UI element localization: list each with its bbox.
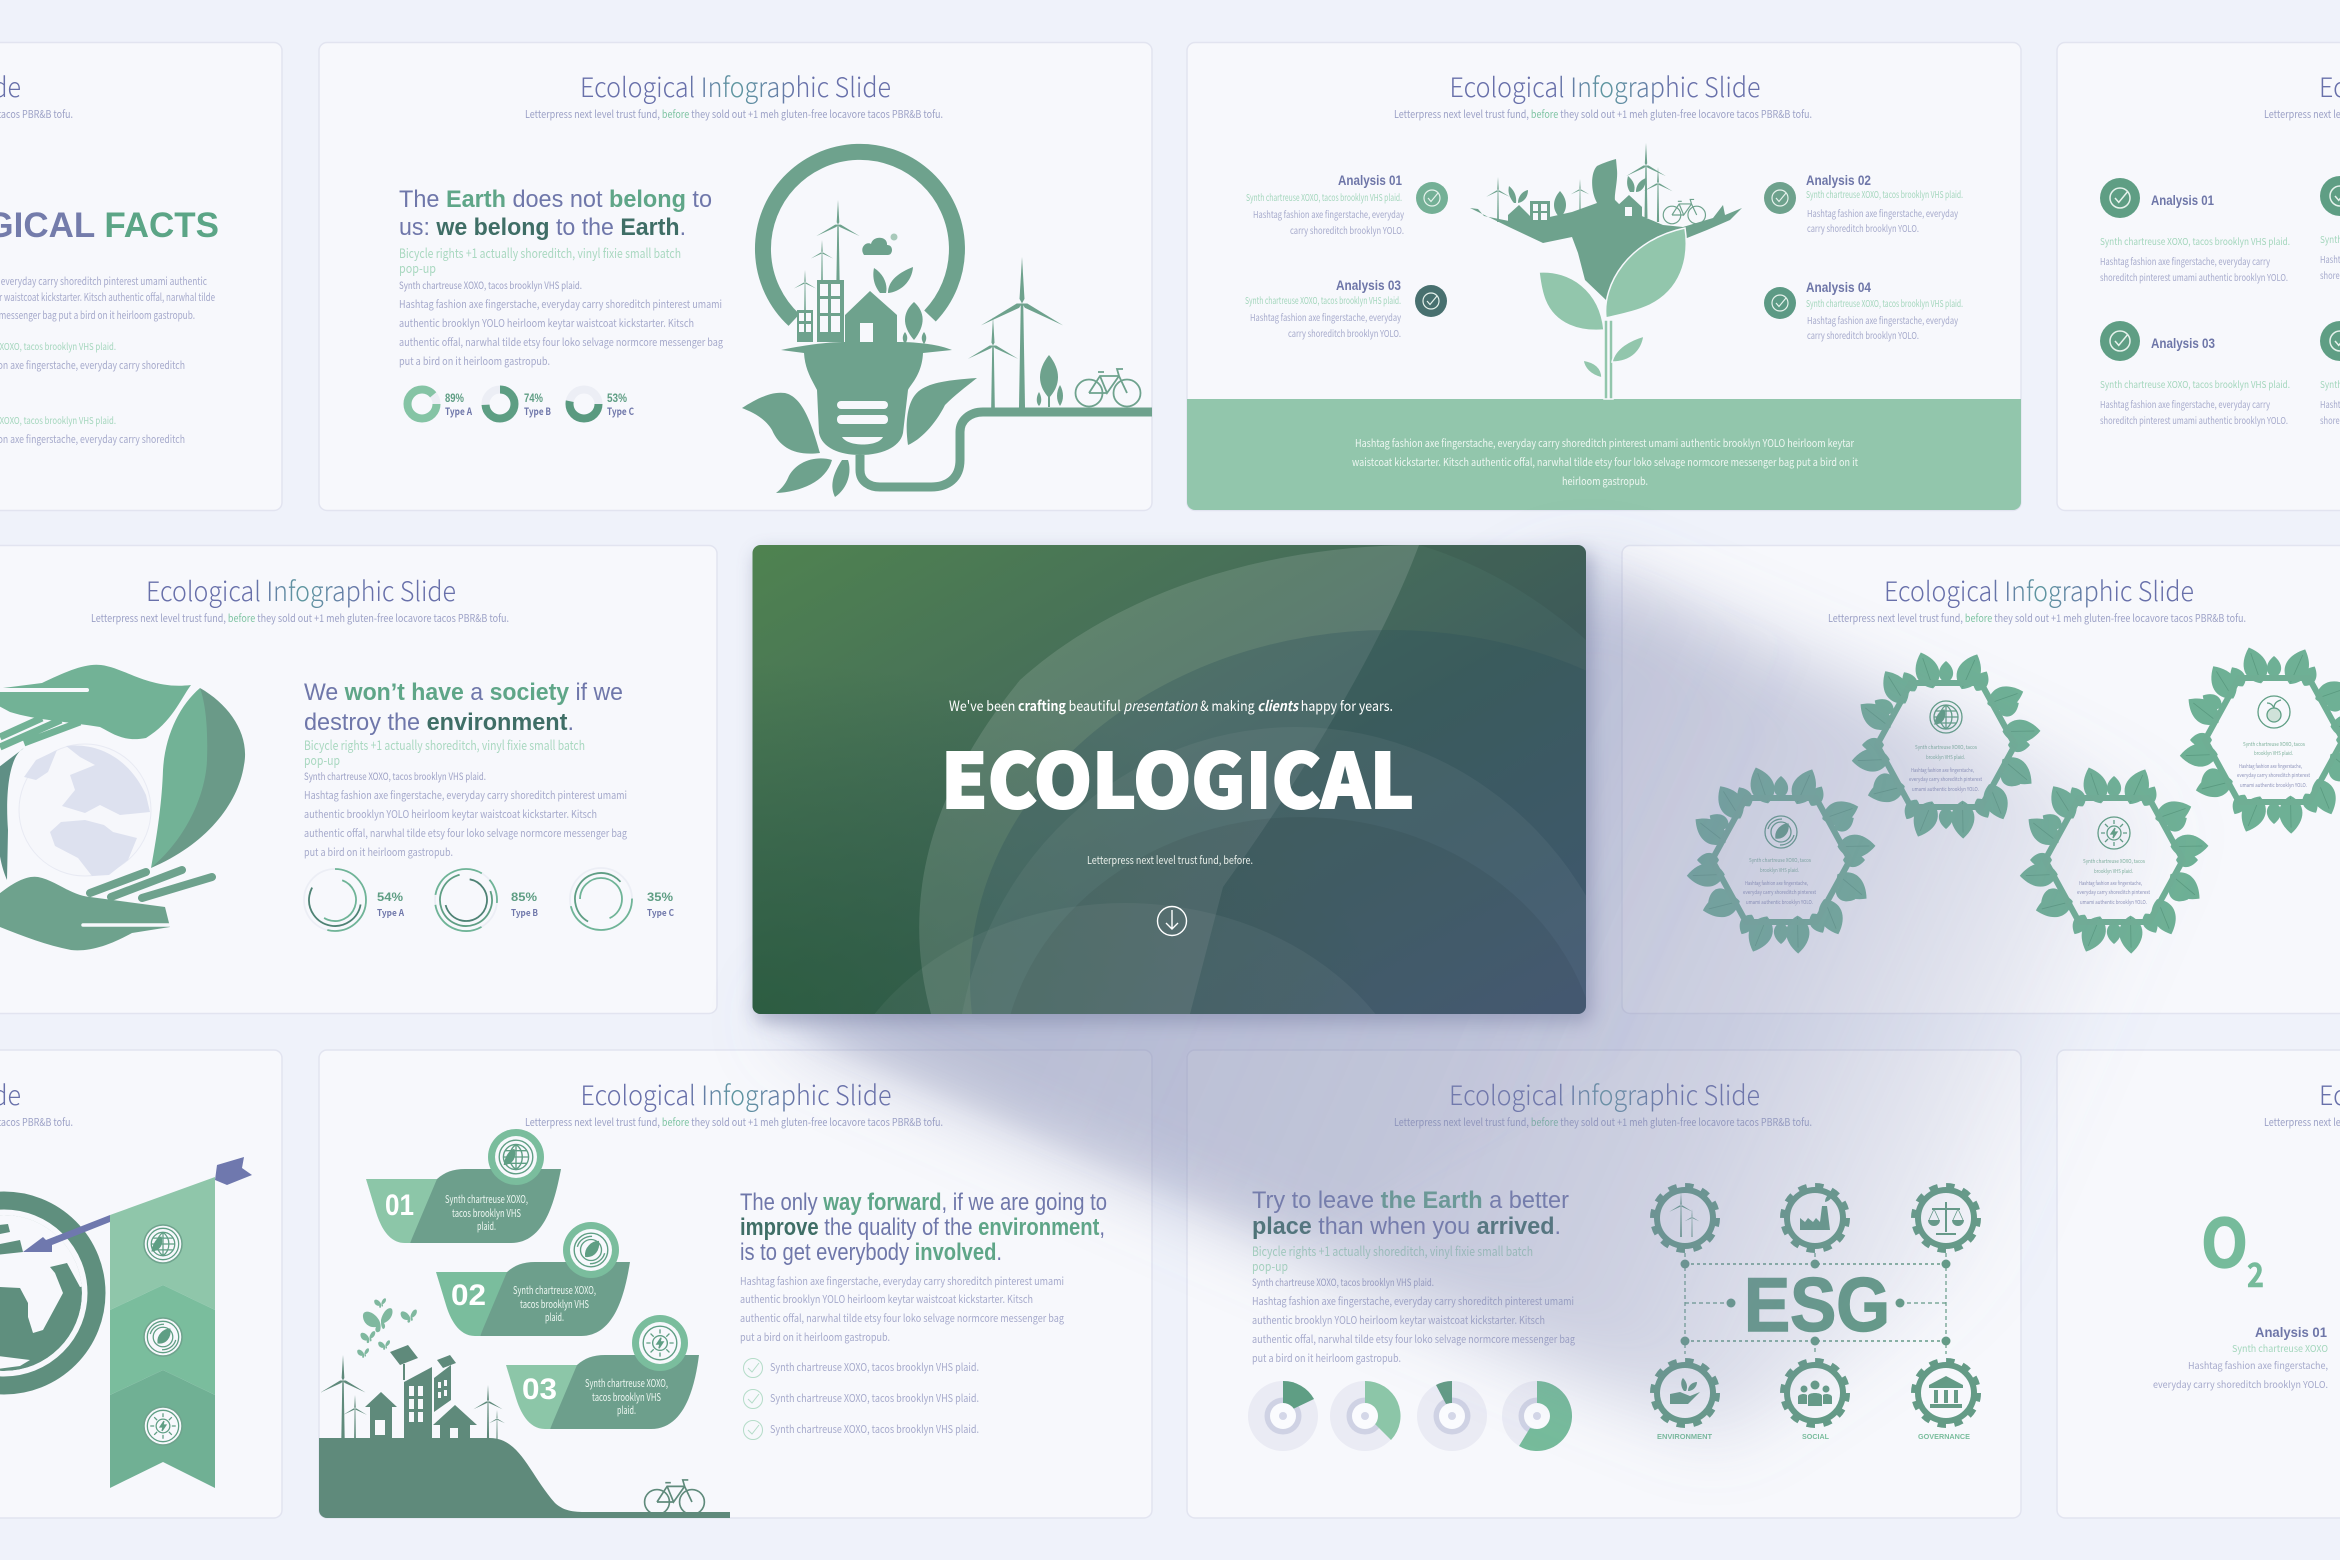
heading: We won’t have a society if we: [304, 679, 623, 706]
title: Letterpress next level trust fund, before they sold out +1 meh gluten-free locavore tacos PBR&B tofu.: [1394, 107, 1812, 122]
step 02: tacos brooklyn VHS: [520, 1297, 589, 1312]
title: [0, 1074, 73, 1130]
glow around centre slide: [755, 551, 1592, 1022]
step 02: plaid.: [545, 1310, 564, 1325]
hexagon 1: Hashtag fashion axe fingerstache,: [1745, 879, 1808, 887]
title: Ecological Infographic Slide: [1449, 1074, 1760, 1113]
heading: place than when you arrived.: [1252, 1213, 1561, 1240]
icon: gear scales: [1914, 1186, 1978, 1250]
text block: authentic offal, narwhal tilde etsy four loko selvage normcore messenger bag: [740, 1311, 1064, 1326]
title: Ecological Infographic Slide: [580, 66, 891, 105]
text block: Bicycle rights +1 actually shoreditch, vinyl fixie small batch: [399, 243, 681, 262]
title: [1394, 1074, 1812, 1130]
text block: [0, 274, 215, 447]
text block: put a bird on it heirloom gastropub.: [399, 354, 550, 369]
step 01: [366, 1129, 561, 1243]
title: Letterpress next level trust fund, before they sold out +1 meh gluten-free locavore tacos PBR&B tofu.: [525, 1115, 943, 1130]
title: [0, 66, 73, 122]
step 01: Synth chartreuse XOXO,: [445, 1192, 528, 1207]
title: Ecological Infographic Slide: [146, 570, 456, 609]
analysis 03: shoreditch pinterest umami authentic brooklyn YOLO.: [2100, 413, 2288, 427]
gear labels: SOCIAL: [1802, 1432, 1829, 1441]
step 03: plaid.: [617, 1403, 636, 1418]
analysis 03: carry shoreditch brooklyn YOLO.: [1288, 326, 1401, 340]
text block: authentic offal, narwhal tilde etsy four loko selvage normcore messenger bag: [304, 826, 627, 841]
text block: pop-up: [1252, 1256, 1288, 1275]
title: Letterpress next level trust fund, before they sold out +1 meh gluten-free locavore tacos PBR&B tofu.: [91, 611, 509, 626]
heading: [1252, 1187, 1569, 1240]
hexagon 3: everyday carry shoreditch pinterest: [2077, 888, 2150, 896]
heading: The Earth does not belong to: [399, 186, 712, 213]
heading: The only way forward, if we are going to: [740, 1189, 1107, 1216]
panel: society and environment: [0, 546, 717, 1014]
analysis 03: [1245, 277, 1447, 340]
green footer band: waistcoat kickstarter. Kitsch authentic offal, narwhal tilde etsy four loko selvage normcore messenger bag put a bird on it: [1352, 455, 1858, 470]
panel: centre cover slide: [752, 545, 1586, 1014]
analysis 03: Analysis 03: [1336, 277, 1401, 293]
green footer band: Hashtag fashion axe fingerstache, everyday carry shoreditch pinterest umami authentic brooklyn YOLO heirloom keytar: [1355, 436, 1855, 451]
step 01: plaid.: [477, 1219, 496, 1234]
gear labels: [1657, 1432, 1970, 1441]
O2 symbol: 2: [2247, 1249, 2264, 1297]
analysis 01: Analysis 01: [2151, 192, 2214, 208]
hexagon 1: Synth chartreuse XOXO, tacos: [1749, 856, 1811, 864]
analysis 04: Analysis 04: [1806, 279, 1871, 295]
O2 symbol: O: [2201, 1191, 2248, 1287]
green footer band: heirloom gastropub.: [1562, 474, 1648, 489]
text block: put a bird on it heirloom gastropub.: [1252, 1351, 1401, 1366]
title: [525, 66, 943, 122]
text block: Synth chartreuse XOXO, tacos brooklyn VHS plaid.: [304, 768, 486, 783]
analysis 02: carry shoreditch brooklyn YOLO.: [1807, 221, 1919, 235]
analysis 03: [2100, 321, 2290, 427]
hexagon 3: Hashtag fashion axe fingerstache,: [2079, 879, 2142, 887]
subtitle: Letterpress next level trust fund, before.: [1087, 852, 1253, 868]
panel: O2 analysis (cropped right): [2057, 1050, 2340, 1518]
icon: gear factory: [1782, 1186, 1848, 1250]
text block: [304, 735, 627, 860]
hexagon 2: everyday carry shoreditch pinterest: [1909, 775, 1982, 783]
text block: authentic brooklyn YOLO heirloom keytar waistcoat kickstarter. Kitsch: [304, 807, 597, 822]
green footer band: [1187, 399, 2021, 510]
icon: gear governance: [1914, 1360, 1978, 1426]
donut charts: [408, 390, 634, 418]
heading: Try to leave the Earth a better: [1252, 1187, 1569, 1214]
hexagon 3: [2019, 764, 2209, 956]
text block: [399, 243, 723, 369]
analysis 03: Hashtag fashion axe fingerstache, everyday carry: [2100, 397, 2270, 411]
hexagon 4 (cropped): umami authentic brooklyn YOLO.: [2240, 781, 2307, 789]
analysis 03: Synth chartreuse XOXO, tacos brooklyn VHS plaid.: [2100, 377, 2290, 391]
analysis 01: [2100, 178, 2290, 284]
donut charts: 74%: [524, 391, 543, 405]
analysis 01: [1246, 172, 1448, 237]
checklist: Synth chartreuse XOXO, tacos brooklyn VHS plaid.: [770, 1422, 979, 1437]
title: [525, 1074, 943, 1130]
title: Letterpress next level trust fund, before they sold out +1 meh gluten-free locavore tacos PBR&B tofu.: [1394, 1115, 1812, 1130]
hexagon 2: Synth chartreuse XOXO, tacos: [1915, 743, 1977, 751]
title: [2264, 1074, 2340, 1130]
title: [1394, 66, 1812, 122]
analysis 04: [1764, 279, 1963, 342]
step 03: 03: [522, 1373, 557, 1406]
donut charts: 53%: [607, 391, 627, 405]
ring charts: [304, 858, 674, 942]
analysis 02: [1764, 172, 1963, 235]
hexagon 2: Hashtag fashion axe fingerstache,: [1911, 766, 1974, 774]
text block: put a bird on it heirloom gastropub.: [304, 845, 453, 860]
title: Letterpress next level trust fund, before they sold out +1 meh gluten-free locavore tacos PBR&B tofu.: [525, 107, 943, 122]
step 01: tacos brooklyn VHS: [452, 1206, 521, 1221]
text block: authentic offal, narwhal tilde etsy four loko selvage normcore messenger bag: [1252, 1332, 1575, 1347]
title: Ecological Infographic Slide: [1884, 570, 2194, 609]
analysis 01: Analysis 01: [2255, 1324, 2327, 1340]
donut charts: Type A: [445, 403, 472, 418]
hexagon 3: Synth chartreuse XOXO, tacos: [2083, 857, 2145, 865]
analysis 01: Analysis 01: [1338, 172, 1402, 188]
background curves: [875, 545, 1586, 1014]
analysis 03: Synth chartreuse XOXO, tacos brooklyn VHS plaid.: [1245, 293, 1401, 307]
title: Ecological Infographic Slide: [580, 1074, 892, 1113]
panel: analysis list (cropped right): [2057, 42, 2340, 510]
ring charts: Type B: [511, 906, 538, 919]
icon: gear wind turbines: [1652, 1186, 1718, 1250]
hexagon 4 (cropped): [2179, 644, 2340, 836]
analysis 01: Hashtag fashion axe fingerstache, everyday carry: [2100, 254, 2270, 268]
panel: analysis with man and plant: [1187, 42, 2021, 510]
analysis 01: [2153, 1324, 2328, 1391]
text block: Synth chartreuse XOXO, tacos brooklyn VHS plaid.: [399, 277, 582, 292]
text block: authentic offal, narwhal tilde etsy four loko selvage normcore messenger bag: [399, 335, 723, 350]
text block: authentic brooklyn YOLO heirloom keytar waistcoat kickstarter. Kitsch: [740, 1292, 1033, 1307]
illustration: hands and globe: [0, 665, 245, 950]
analysis 03: Analysis 03: [2151, 335, 2215, 351]
analysis 01: carry shoreditch brooklyn YOLO.: [1290, 223, 1404, 237]
checklist: Synth chartreuse XOXO, tacos brooklyn VHS plaid.: [770, 1391, 979, 1406]
heading: [304, 679, 623, 736]
analysis 01: Synth chartreuse XOXO, tacos brooklyn VHS plaid.: [1246, 190, 1402, 204]
ESG connectors: [1680, 1253, 1950, 1354]
ring charts: Type C: [647, 906, 674, 919]
heading: [740, 1189, 1107, 1266]
title: Letterpress next level trust fund, before they sold out +1 meh gluten-free locavore tacos PBR&B tofu.: [1828, 611, 2246, 626]
analysis 04: Synth chartreuse XOXO, tacos brooklyn VHS plaid.: [1806, 296, 1963, 310]
title: [2264, 66, 2340, 122]
donut chart 1: [1248, 1381, 1318, 1451]
hexagon 1: umami authentic brooklyn YOLO.: [1746, 898, 1813, 906]
hexagon 4 (cropped): brooklyn VHS plaid.: [2254, 749, 2293, 757]
hexagon 4 (cropped): everyday carry shoreditch pinterest: [2237, 771, 2310, 779]
text block: Bicycle rights +1 actually shoreditch, vinyl fixie small batch: [304, 735, 585, 754]
donut charts: 89%: [445, 391, 464, 405]
ribbon: [110, 1177, 215, 1488]
text block: Hashtag fashion axe fingerstache, everyday carry shoreditch pinterest umami: [1252, 1294, 1574, 1309]
cast shadow of centre slide: crisp near layer: [752, 555, 2130, 1245]
analysis 03: Hashtag fashion axe fingerstache, everyday: [1250, 310, 1401, 324]
hexagon 1: [1686, 764, 1876, 956]
step 02: [436, 1222, 630, 1336]
text block: authentic brooklyn YOLO heirloom keytar waistcoat kickstarter. Kitsch: [399, 316, 694, 331]
analysis 02: Hashtag fashion axe fingerstache, everyday: [1807, 206, 1958, 220]
icon: down arrow in circle: [1158, 906, 1186, 936]
text block: Hashtag fashion axe fingerstache, everyday carry shoreditch pinterest umami: [399, 297, 722, 312]
tagline: We've been crafting beautiful presentation & making clients happy for years.: [949, 696, 1393, 716]
panel: globe and ribbon (cropped left): [0, 1050, 282, 1518]
panel: ESG: [1187, 1050, 2021, 1518]
hexagon 2: brooklyn VHS plaid.: [1926, 753, 1965, 761]
hexagon 4 (cropped): Hashtag fashion axe fingerstache,: [2239, 762, 2302, 770]
step 03: [506, 1315, 699, 1429]
checklist: Synth chartreuse XOXO, tacos brooklyn VHS plaid.: [770, 1360, 979, 1375]
heading: destroy the environment.: [304, 709, 574, 736]
text block: authentic brooklyn YOLO heirloom keytar waistcoat kickstarter. Kitsch: [1252, 1313, 1545, 1328]
hexagon 3: brooklyn VHS plaid.: [2094, 867, 2133, 875]
donut charts: Type C: [607, 403, 634, 418]
hexagon 2: [1851, 649, 2041, 841]
title: Ecological Infographic Slide: [1450, 66, 1760, 105]
panel: hexagon leaf wreaths: [1622, 546, 2340, 1014]
text block: pop-up: [304, 750, 340, 769]
hexagon 4 (cropped): Synth chartreuse XOXO, tacos: [2243, 740, 2305, 748]
ring charts: 35%: [647, 890, 673, 904]
cast shadow of centre slide: soft wide layer: [770, 570, 2340, 1440]
donut charts: Type B: [524, 403, 551, 418]
analysis 01: Hashtag fashion axe fingerstache, everyday: [1253, 207, 1404, 221]
icon: gear social: [1782, 1360, 1848, 1426]
step 02: Synth chartreuse XOXO,: [513, 1283, 596, 1298]
analysis 01: everyday carry shoreditch brooklyn YOLO.: [2153, 1377, 2328, 1391]
analysis 04: carry shoreditch brooklyn YOLO.: [1807, 328, 1919, 342]
illustration: light bulb with city and turbines: [742, 152, 1152, 497]
heading: [399, 186, 712, 241]
text block: [740, 1274, 1064, 1345]
donut chart 4: [1502, 1381, 1572, 1451]
heading: improve the quality of the environment,: [740, 1214, 1105, 1241]
panel: three steps: [319, 1050, 1152, 1518]
analysis 01: Synth chartreuse XOXO, tacos brooklyn VHS plaid.: [2100, 234, 2290, 248]
hexagon 2: umami authentic brooklyn YOLO.: [1912, 785, 1979, 793]
donut chart 2: [1330, 1381, 1401, 1451]
panel: ecological facts slide (cropped left): [0, 42, 282, 510]
ring charts: 85%: [511, 890, 537, 904]
ring charts: Type A: [377, 906, 404, 919]
step 01: 01: [385, 1189, 414, 1222]
step 03: tacos brooklyn VHS: [592, 1390, 661, 1405]
illustration: man growing from plant: [1470, 143, 1742, 399]
ESG wordmark: ESG: [1744, 1263, 1890, 1348]
icon: globe: [0, 1200, 96, 1386]
text block: Hashtag fashion axe fingerstache, everyday carry shoreditch pinterest umami: [740, 1274, 1064, 1289]
main title: ECOLOGICAL: [941, 721, 1414, 830]
hexagon 3: umami authentic brooklyn YOLO.: [2080, 898, 2147, 906]
illustration: city on a hill with bicycle: [319, 1298, 730, 1518]
title: [91, 570, 509, 626]
analysis 01: Synth chartreuse XOXO: [2232, 1341, 2328, 1355]
gear labels: ENVIRONMENT: [1657, 1432, 1712, 1441]
step 02: 02: [451, 1279, 486, 1312]
text block: Hashtag fashion axe fingerstache, everyday carry shoreditch pinterest umami: [304, 788, 627, 803]
gear labels: GOVERNANCE: [1918, 1432, 1970, 1441]
hexagon 1: everyday carry shoreditch pinterest: [1743, 888, 1816, 896]
arrow: [23, 1157, 252, 1252]
text block: pop-up: [399, 258, 436, 277]
analysis 02: Synth chartreuse XOXO, tacos brooklyn VHS plaid.: [1806, 187, 1963, 201]
text block: Synth chartreuse XOXO, tacos brooklyn VHS plaid.: [1252, 1274, 1434, 1289]
title: [1828, 570, 2246, 626]
heading: is to get everybody involved.: [740, 1239, 1002, 1266]
icon: gear environment: [1652, 1360, 1718, 1426]
analysis 02 and 04 (cropped): [2320, 176, 2340, 427]
hexagon 1: brooklyn VHS plaid.: [1760, 866, 1799, 874]
text block: put a bird on it heirloom gastropub.: [740, 1330, 890, 1345]
panel: earth does not belong to us: [319, 42, 1152, 510]
checklist: [744, 1358, 979, 1440]
text block: [1252, 1241, 1575, 1366]
analysis 02: Analysis 02: [1806, 172, 1871, 188]
analysis 04: Hashtag fashion axe fingerstache, everyday: [1807, 313, 1958, 327]
analysis 01: Hashtag fashion axe fingerstache,: [2188, 1358, 2328, 1372]
heading: us: we belong to the Earth.: [399, 214, 686, 241]
text block: Bicycle rights +1 actually shoreditch, vinyl fixie small batch: [1252, 1241, 1533, 1260]
ring charts: 54%: [377, 890, 403, 904]
analysis 01: shoreditch pinterest umami authentic brooklyn YOLO.: [2100, 270, 2288, 284]
donut chart 3: [1417, 1381, 1487, 1451]
step 03: Synth chartreuse XOXO,: [585, 1376, 668, 1391]
